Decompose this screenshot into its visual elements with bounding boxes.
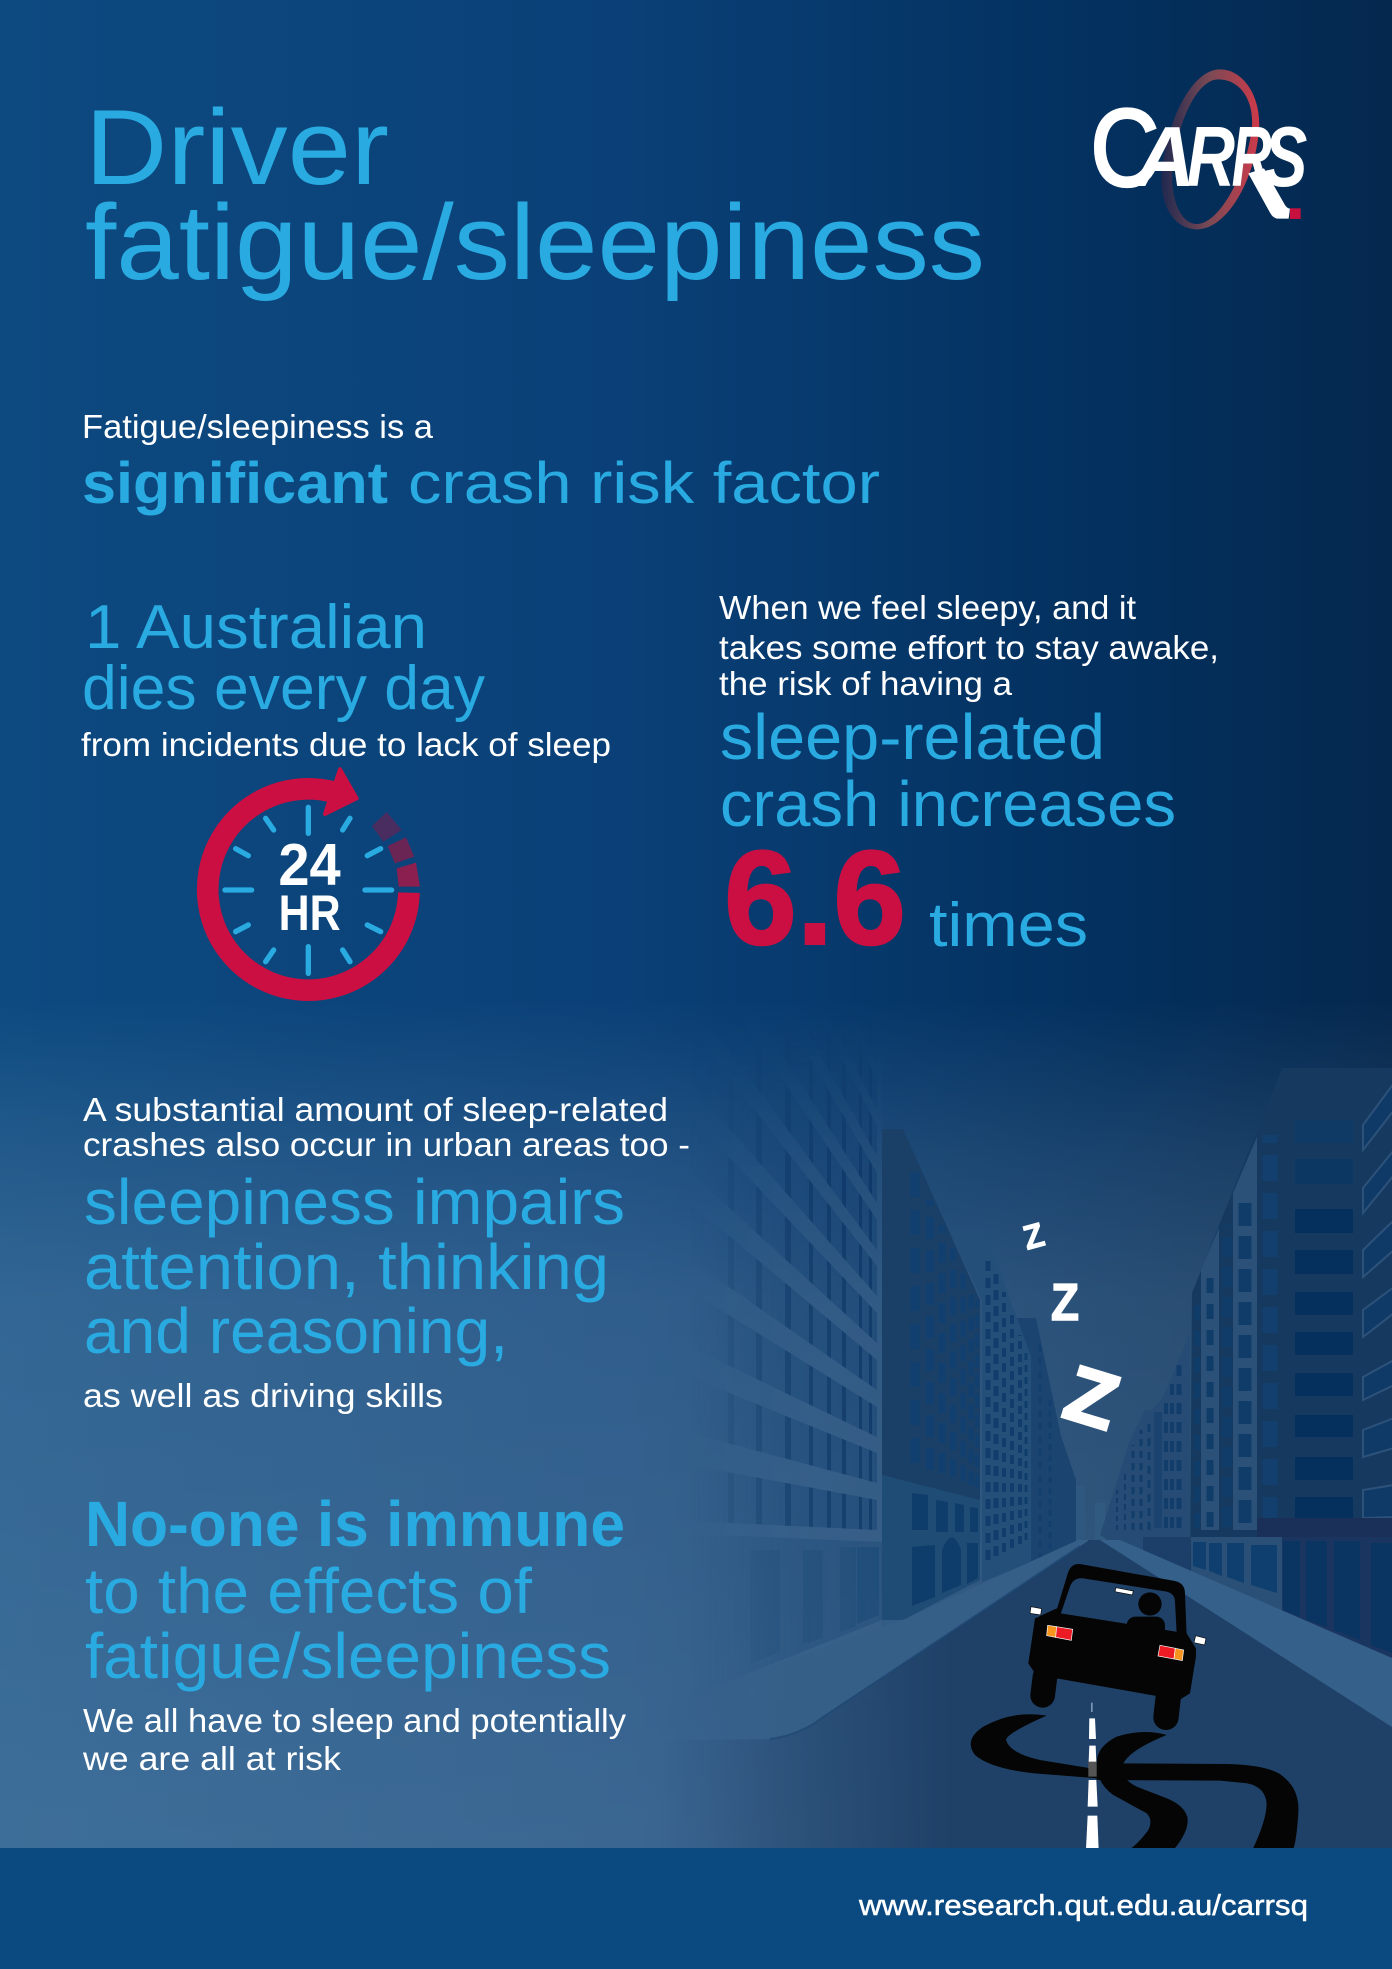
text block: no-one is immune: No-one is immune	[85, 1488, 625, 1560]
text block: 1 Australian dies every day: 1 Australian	[85, 593, 427, 662]
text block: urban crashes: attention, thinking	[84, 1231, 609, 1303]
left curb line	[770, 1546, 1080, 1739]
text block: urban crashes	[83, 1091, 690, 1414]
right block storefront	[1191, 1518, 1392, 1658]
logo letters ARRS: S	[1264, 110, 1307, 205]
title: Driver	[85, 87, 389, 207]
building: large right block	[1190, 1068, 1392, 1660]
statistic: 6.6 times: 6.6	[724, 824, 906, 973]
left block windows	[728, 1090, 877, 1530]
right block front windows	[1295, 1120, 1353, 1520]
icon: 24 hour clock	[208, 769, 420, 990]
road markings and skid marks and car	[971, 1564, 1298, 1849]
text block: sleep-related crash increases	[719, 589, 1219, 973]
right block side wall windows	[1197, 1135, 1270, 1528]
skid marks	[971, 1714, 1298, 1849]
car mirrors	[1030, 1588, 1206, 1645]
building: distant towers left	[1017, 1318, 1105, 1585]
left block storefront	[750, 1538, 882, 1664]
clock label	[278, 831, 341, 941]
text block: urban crashes: as well as driving skills	[83, 1377, 443, 1414]
text block: urban crashes: and reasoning,	[84, 1295, 508, 1367]
statistic: 6.6 times	[724, 824, 1088, 973]
logo letters ARRS: A	[1133, 110, 1195, 205]
sleep letters Z Z Z: Z	[1019, 1216, 1048, 1258]
text block: no-one is immune: We all have to sleep and potentially	[83, 1702, 627, 1739]
right sidewalk	[1100, 1540, 1392, 1727]
text block: sleep-related crash increases: crash increases	[720, 768, 1176, 840]
clock ticks	[225, 807, 392, 973]
road	[660, 1540, 1392, 1848]
text block: 1 Australian dies every day: dies every day	[82, 654, 485, 723]
car tail lights	[1047, 1625, 1184, 1661]
logo: CARRS	[1091, 69, 1307, 229]
sleep letters Z Z Z: Z	[1051, 1274, 1079, 1332]
footer bar	[0, 1848, 1392, 1969]
text block: 1 Australian dies every day: from incidents due to lack of sleep	[81, 726, 611, 763]
text block: no-one is immune	[82, 1488, 627, 1777]
text block: sleep-related crash increases: takes some effort to stay awake,	[719, 629, 1219, 666]
clock label: 24	[278, 831, 341, 898]
right block corner panes	[1363, 1083, 1392, 1518]
building: distant towers right	[1100, 1330, 1190, 1580]
subheading: significant crash risk factor: Fatigue/sleepiness is a	[82, 408, 434, 445]
logo letters ARRS	[1133, 110, 1307, 205]
text block: sleep-related crash increases: When we feel sleepy, and it	[719, 589, 1136, 626]
logo ring	[1161, 69, 1259, 229]
clock label: HR	[279, 885, 341, 941]
text block: urban crashes: sleepiness impairs	[84, 1166, 625, 1238]
logo letters ARRS: R	[1232, 110, 1272, 205]
footer url: www.research.qut.edu.au/carrsq	[858, 1890, 1308, 1922]
text block: no-one is immune: fatigue/sleepiness	[85, 1620, 611, 1692]
logo letter C: C	[1091, 87, 1159, 210]
car	[1028, 1564, 1206, 1717]
text block: no-one is immune: we are all at risk	[82, 1740, 342, 1777]
left sidewalk	[660, 1540, 1088, 1740]
centre line	[1086, 1703, 1099, 1849]
right block side wall piers	[1201, 1137, 1257, 1530]
text block: urban crashes: crashes also occur in urban areas too -	[83, 1126, 690, 1163]
logo letters ARRS: R	[1187, 110, 1235, 205]
building: dark left block	[882, 1129, 980, 1620]
text block: 1 Australian dies every day	[81, 593, 611, 763]
text block: no-one is immune: to the effects of	[85, 1555, 532, 1627]
text block: sleep-related crash increases: the risk of having a	[719, 665, 1013, 702]
text block: sleep-related crash increases: sleep-related	[720, 701, 1105, 773]
sleep letters Z Z Z: Z	[1055, 1348, 1129, 1447]
statistic: 6.6 times: times	[929, 891, 1088, 960]
storefront left	[882, 1475, 980, 1620]
logo R tail	[1248, 168, 1290, 219]
subheading: significant crash risk factor	[82, 408, 880, 516]
title: fatigue/sleepiness	[85, 182, 985, 302]
title	[85, 87, 985, 302]
text block: urban crashes: A substantial amount of sleep-related	[83, 1091, 668, 1128]
logo red square	[1290, 208, 1301, 219]
sleep letters Z Z Z	[1019, 1216, 1129, 1447]
subheading: significant crash risk factor: crash risk factor	[408, 451, 880, 516]
clock ring with arrow	[208, 769, 409, 990]
subheading: significant crash risk factor: significant	[82, 451, 388, 516]
city illustration	[721, 1068, 1392, 1848]
driver silhouette	[1127, 1592, 1165, 1640]
building: large left block	[728, 1108, 879, 1662]
faded ring segments	[372, 812, 420, 887]
building: mid left lighter block	[950, 1230, 1031, 1582]
